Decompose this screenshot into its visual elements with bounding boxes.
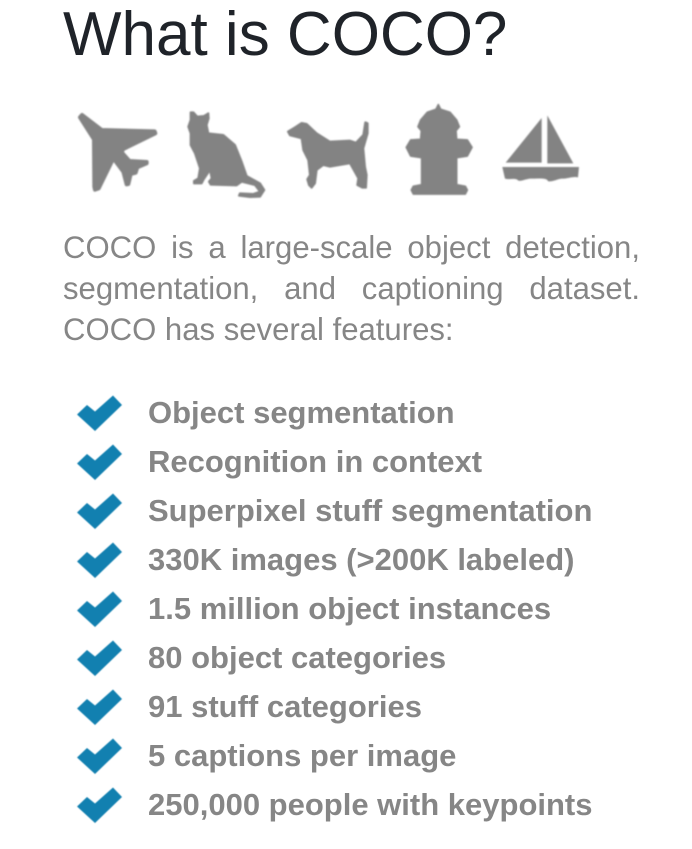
feature: 91 stuff categories: 91 stuff categories: [148, 688, 422, 724]
icon row: [77, 103, 580, 199]
description text: COCO is a large-scale object detection,: [63, 230, 640, 265]
icon: airplane: [80, 115, 155, 190]
checklist of features: [76, 394, 592, 824]
feature: superpixel stuff segmentation: Superpixel stuff segmentation: [148, 492, 592, 528]
icon: cat: [188, 112, 264, 197]
feature: 1.5 million object instances: 1.5 million object instances: [148, 590, 551, 626]
feature: 5 captions per image: 5 captions per image: [148, 738, 456, 772]
feature: 80 object categories: 80 object categories: [148, 640, 446, 674]
checkmark icons: [76, 395, 122, 824]
icon: sailboat: [502, 115, 579, 181]
description text: [63, 230, 640, 347]
icon: dog: [288, 122, 368, 188]
description text: segmentation, and captioning dataset.: [63, 271, 640, 306]
feature: recognition in context: Recognition in context: [148, 444, 482, 478]
feature: 330K images: 330K images (>200K labeled): [148, 542, 574, 576]
icon: fire hydrant: [406, 105, 472, 194]
feature: 250,000 people with keypoints: 250,000 people with keypoints: [148, 786, 592, 822]
title: What is COCO?: [63, 0, 507, 69]
description text: COCO has several features:: [63, 312, 454, 347]
feature: object segmentation: Object segmentation: [148, 394, 455, 430]
